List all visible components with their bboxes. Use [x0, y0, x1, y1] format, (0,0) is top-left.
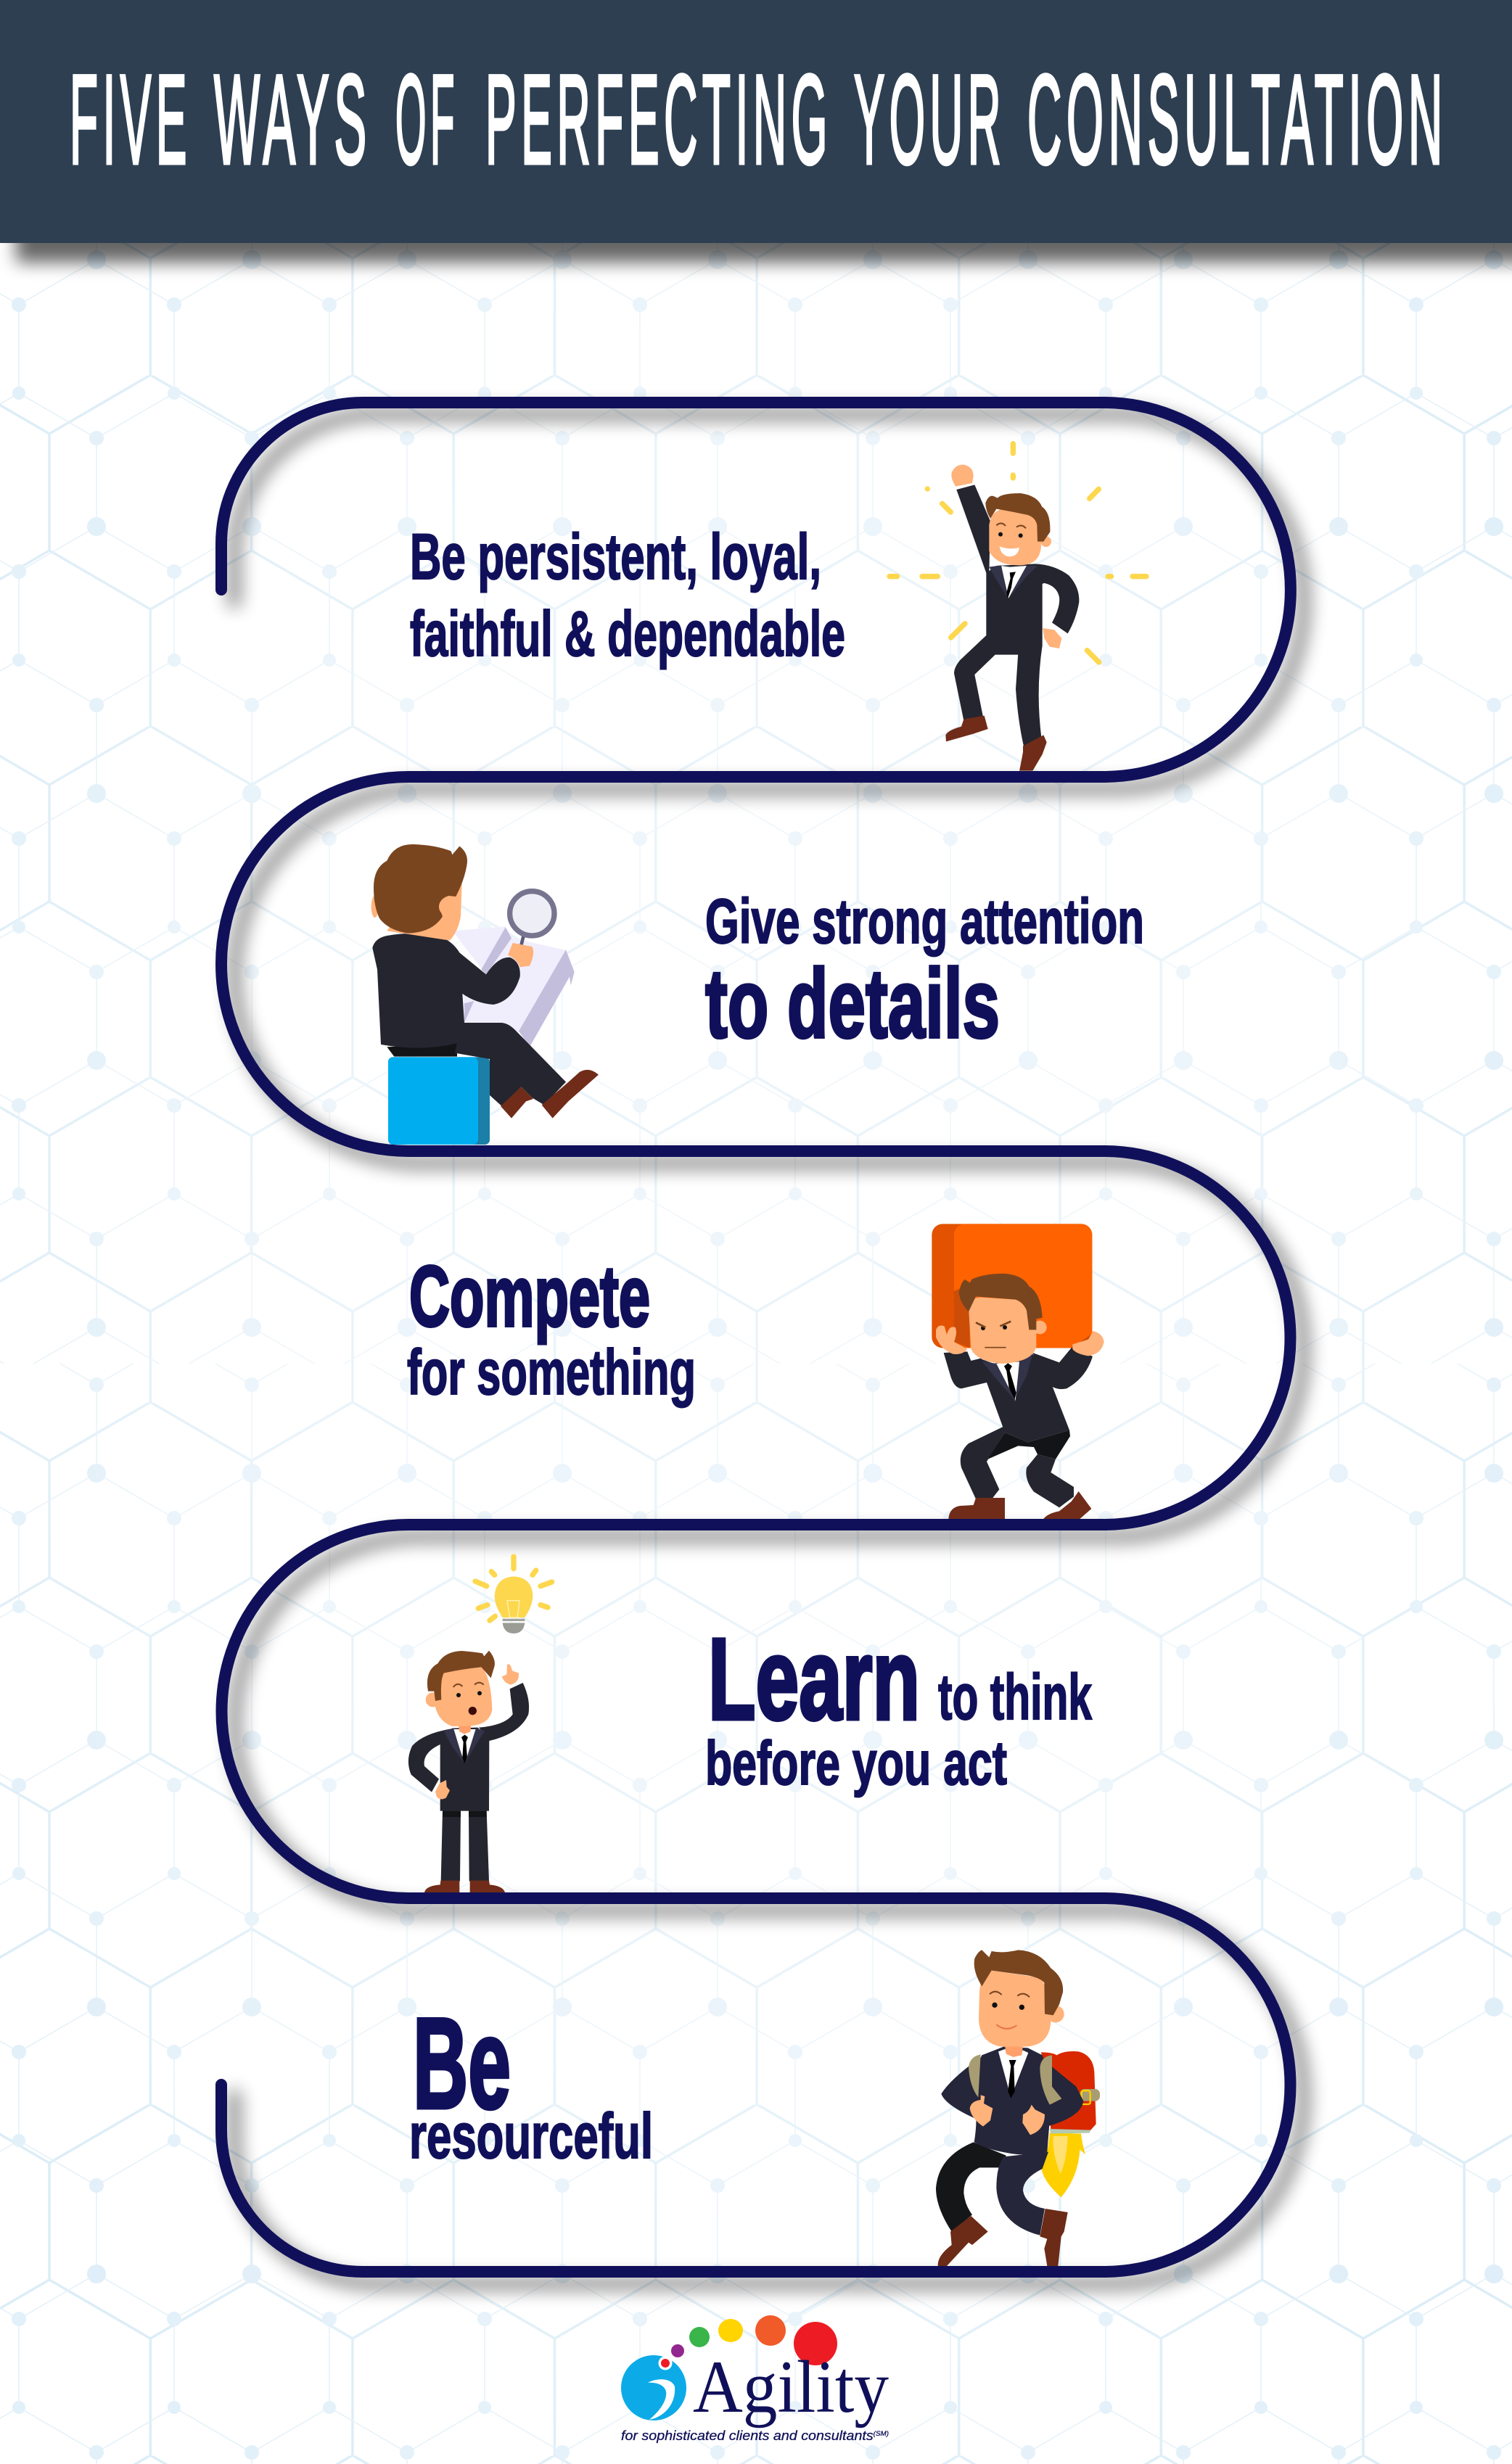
logo dots	[671, 2315, 837, 2365]
icon: seated man reading with magnifier	[371, 844, 599, 1145]
title: WAYS	[214, 49, 371, 191]
step 2 text	[705, 886, 1144, 1058]
step 2 text: to details	[705, 949, 1000, 1058]
winding navy path	[221, 403, 1291, 2272]
step 4 text	[705, 1614, 1092, 1798]
step 3 text: Compete	[409, 1248, 650, 1345]
title	[70, 49, 1447, 191]
title: FIVE	[70, 49, 192, 191]
step 2 text: Give strong attention	[705, 886, 1144, 957]
step 5 text	[409, 1991, 653, 2172]
icon: man with idea light bulb	[408, 1557, 552, 1892]
icon: cheering man with yellow rays	[889, 444, 1146, 771]
header band	[0, 0, 1512, 243]
logo tagline: for sophisticated clients and consultants	[621, 2428, 852, 2443]
logo tagline: (SM)	[874, 2430, 889, 2437]
step 4 text: to think	[938, 1660, 1092, 1733]
step 1 text	[410, 520, 845, 669]
logo: Agility	[621, 2315, 889, 2443]
step 5 text: resourceful	[409, 2100, 653, 2172]
title: YOUR	[854, 49, 1006, 191]
step 1 text: Be persistent, loyal,	[410, 520, 821, 593]
step 3 text: for something	[407, 1336, 696, 1408]
title: PERFECTING	[485, 49, 832, 191]
step 5 text: Be	[413, 1991, 511, 2135]
icon: man lifting orange box	[932, 1224, 1104, 1519]
step 4 text: before you act	[705, 1729, 1007, 1798]
step 1 text: faithful & dependable	[410, 598, 845, 669]
step 4 text: Learn	[708, 1614, 920, 1744]
step 3 text	[407, 1248, 696, 1408]
logo wordmark: Agility	[693, 2346, 889, 2428]
title: OF	[395, 49, 459, 191]
logo mark	[621, 2355, 686, 2420]
icon: man with rocket backpack	[936, 1950, 1100, 2266]
